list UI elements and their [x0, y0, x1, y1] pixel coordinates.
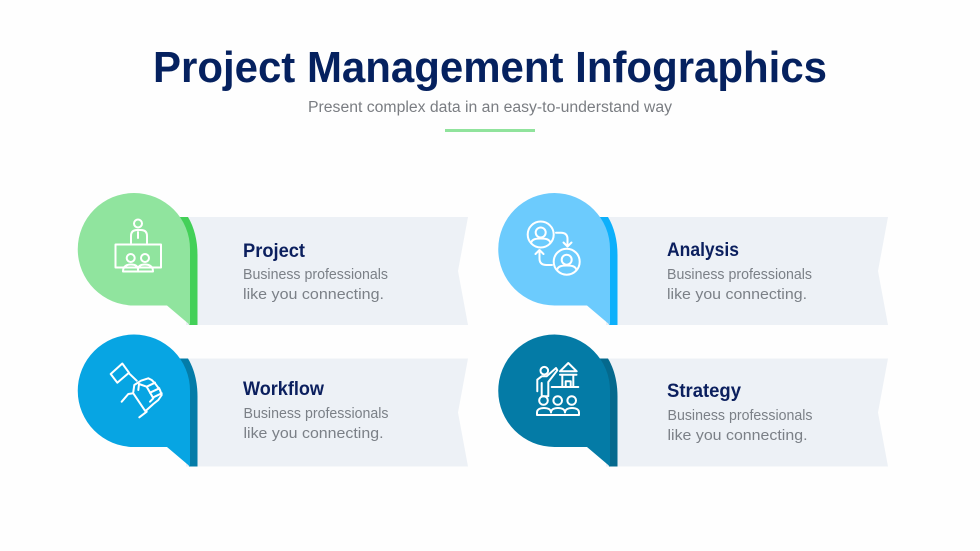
title: Project Management Infographics: [153, 43, 827, 92]
heading: Strategy: Strategy: [667, 381, 741, 402]
subtitle: Present complex data in an easy-to-understand way: [308, 99, 672, 116]
card: Workflow: [78, 334, 468, 466]
bubble shadow band: [597, 358, 618, 466]
bubble shadow band: [177, 358, 198, 466]
icon: people exchange: [528, 222, 580, 275]
accent underline: [445, 129, 535, 132]
card: Strategy: [498, 334, 888, 466]
description: Analysis: Business professionals: [667, 267, 812, 283]
panel: Project background: [186, 217, 468, 325]
speech bubble: [78, 334, 190, 466]
description: Workflow: like you connecting.: [244, 426, 384, 442]
description: Project: Business professionals: [243, 267, 388, 283]
description: Workflow: Business professionals: [244, 406, 388, 422]
speech bubble: [78, 193, 190, 325]
description: Strategy: like you connecting.: [668, 428, 808, 444]
speech bubble: [498, 334, 610, 466]
description: Project: like you connecting.: [243, 287, 384, 303]
panel: Strategy background: [606, 358, 888, 466]
icon: presenter and audience: [116, 220, 161, 272]
heading: Analysis: Analysis: [667, 240, 739, 261]
bubble shadow band: [597, 217, 618, 325]
panel: Analysis background: [606, 217, 888, 325]
bubble shadow band: [177, 217, 198, 325]
speech bubble: [498, 193, 610, 325]
heading: Workflow: Workflow: [243, 379, 324, 400]
card: Analysis: [498, 193, 888, 325]
icon: presenter with building and audience: [537, 363, 579, 415]
description: Analysis: like you connecting.: [667, 287, 807, 303]
icon: hand holding flag: [111, 364, 162, 417]
description: Strategy: Business professionals: [668, 408, 812, 424]
card: Project: [78, 193, 468, 325]
panel: Workflow background: [186, 358, 468, 466]
heading: Project: Project: [243, 241, 306, 262]
